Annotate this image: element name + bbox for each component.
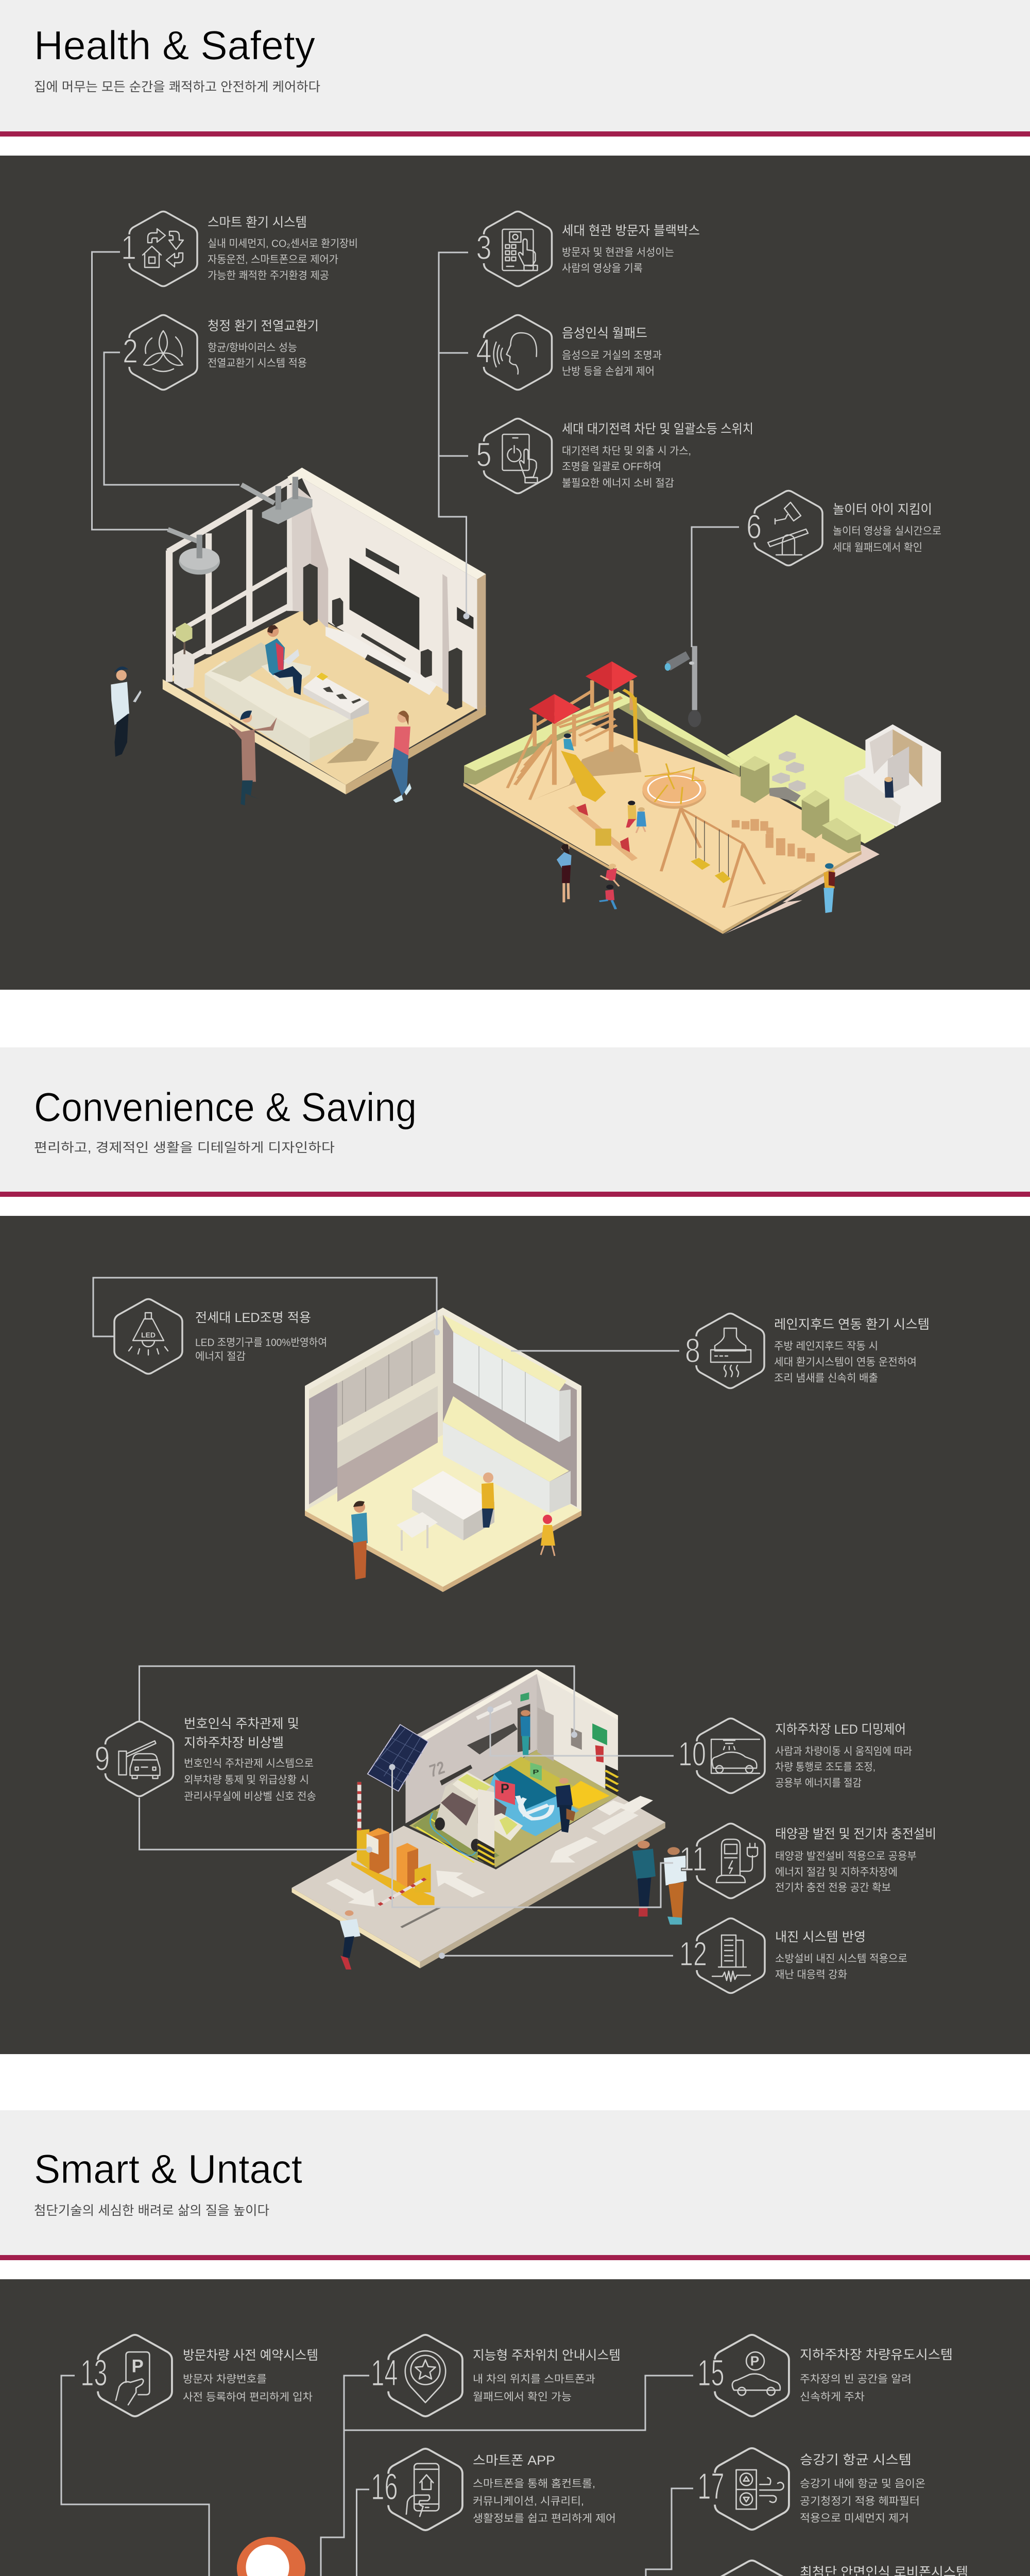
text on wall: 72: [427, 1757, 447, 1782]
text 10: [775, 1722, 912, 1789]
text 8: 세대 환기시스템이 연동 운전하여: [774, 1356, 917, 1368]
text 17: 공기청정기 적용 헤파필터: [800, 2496, 920, 2507]
section header: Health & Safety: [0, 0, 1030, 137]
item 16: smartphone app: [371, 2449, 616, 2530]
badge 9: 9: [95, 1739, 110, 1777]
text 7: 전세대 LED조명 적용: [195, 1311, 311, 1325]
text 11: 태양광 발전설비 적용으로 공용부: [775, 1851, 917, 1862]
text 12: 소방설비 내진 시스템 적용으로: [775, 1953, 907, 1965]
upper cabinets left: [319, 1328, 435, 1437]
text 6: [833, 502, 941, 553]
text 12: 내진 시스템 반영: [775, 1930, 866, 1944]
text 2: [208, 319, 319, 369]
item 6: playground child watch: [746, 490, 941, 566]
text 9: 번호인식 주차관제 및: [184, 1717, 299, 1731]
text 3: 방문자 및 현관을 서성이는: [562, 246, 674, 259]
woman in brown dress: [228, 710, 277, 805]
sofa: [204, 674, 310, 764]
badge 13: [80, 2335, 172, 2416]
badge 15: P: [750, 2353, 759, 2368]
text 5: 세대 대기전력 차단 및 일괄소등 스위치: [562, 422, 753, 436]
entry gate: [351, 1782, 435, 1905]
item 14: parking location guide: [371, 2335, 621, 2416]
running children: [599, 863, 619, 909]
bay floors: [409, 1750, 618, 1867]
item 17: elevator antibacterial: [697, 2448, 925, 2530]
text 5: 조명을 일괄로 OFF하여: [562, 461, 661, 473]
section header: Smart & Untact: [0, 2110, 1030, 2260]
woman at island: [482, 1472, 494, 1528]
item 7: LED lighting: [114, 1299, 327, 1374]
exit sign and bell: [592, 1723, 607, 1745]
badge 16: [371, 2449, 462, 2530]
text 12: 재난 대응력 강화: [775, 1969, 847, 1980]
badge 12: 12: [679, 1935, 707, 1973]
badge 9: [95, 1722, 173, 1796]
item 1: smart ventilation: [121, 211, 358, 286]
text 11: 에너지 절감 및 지하주차장에: [775, 1866, 898, 1878]
woman with tablet: [111, 667, 141, 757]
text 16: 커뮤니케이션, 시큐리티,: [473, 2496, 584, 2507]
text 3: 사람의 영상을 기록: [562, 263, 643, 274]
text 10: 사람과 차량이동 시 움직임에 따라: [775, 1745, 912, 1757]
badge 3: 3: [476, 228, 491, 266]
title: Smart & Untact: [34, 2146, 302, 2192]
text 13: 방문자 차량번호를: [183, 2373, 267, 2385]
badge 3: [476, 211, 552, 286]
seesaw: [571, 806, 635, 859]
text 1: 실내 미세먼지, CO₂센서로 환기장비: [208, 238, 358, 249]
item 13: visitor vehicle reservation: [80, 2335, 318, 2416]
badge 4: 4: [476, 332, 491, 370]
text 1: 가능한 쾌적한 주거환경 제공: [208, 270, 329, 281]
badge 5: 5: [476, 435, 491, 473]
text 1: 스마트 환기 시스템: [208, 215, 307, 230]
text 11: 태양광 발전 및 전기차 충전설비: [775, 1827, 936, 1841]
badge 2: 2: [123, 332, 138, 370]
badge 1: [121, 211, 197, 286]
ventilation units: [242, 485, 274, 503]
connectors: section two: [93, 1278, 679, 1959]
island: [412, 1471, 494, 1520]
subtitle: 첨단기술의 세심한 배려로 삶의 질을 높이다: [34, 2204, 269, 2218]
stepping stones: [772, 751, 805, 792]
text 6: 세대 월패드에서 확인: [833, 542, 922, 553]
CCTV camera: [665, 646, 701, 727]
text 9: 관리사무실에 비상벨 신호 전송: [184, 1791, 316, 1802]
text 6: 놀이터 영상을 실시간으로: [833, 526, 941, 537]
badge 5: [476, 418, 552, 494]
coffee table: [303, 674, 369, 714]
text 15: 신속하게 주차: [800, 2391, 865, 2403]
pillars: [478, 1765, 618, 1868]
text 11: 전기차 충전 전용 공간 확보: [775, 1882, 891, 1894]
text 16: [473, 2453, 616, 2524]
badge 15: 15: [697, 2353, 725, 2394]
panel: convenience and saving: [0, 1216, 1030, 2054]
text 9: 번호인식 주차관제 시스템으로: [184, 1758, 314, 1769]
swing: [661, 808, 765, 908]
text 15: [800, 2348, 953, 2403]
badge 8: [685, 1314, 764, 1388]
text 14: 지능형 주차위치 안내시스템: [473, 2348, 621, 2363]
text 8: [774, 1317, 930, 1384]
badge 12: [679, 1919, 765, 1993]
text 2: 항균/항바이러스 성능: [208, 342, 297, 353]
text 16: 생활정보를 쉽고 편리하게 제어: [473, 2513, 616, 2524]
badge 7: LED: [141, 1331, 156, 1339]
item 12: seismic design: [679, 1919, 907, 1993]
badge 7: [114, 1299, 182, 1374]
item 9: license plate recognition: [95, 1717, 316, 1802]
text 10: 지하주차장 LED 디밍제어: [775, 1722, 906, 1737]
badge 17: 17: [697, 2466, 725, 2507]
text 12: [775, 1930, 907, 1980]
illustration: isometric living room: [111, 468, 486, 805]
text 6: 놀이터 아이 지킴이: [833, 502, 932, 517]
text 3: [562, 224, 700, 274]
badge 10: [678, 1719, 765, 1793]
text 5: 불필요한 에너지 소비 절감: [562, 477, 674, 489]
badge 14: 14: [371, 2353, 398, 2394]
illustration: hand holding smartphone: [62, 2537, 580, 2576]
item 5: standby power switch: [476, 418, 753, 494]
text 10: 공용부 에너지를 절감: [775, 1777, 862, 1789]
text 13: 사전 등록하여 편리하게 입차: [183, 2392, 313, 2403]
illustration: isometric playground: [464, 646, 941, 935]
text 4: [562, 326, 662, 377]
badge 4: [476, 315, 552, 389]
item 4: voice wallpad: [476, 315, 662, 389]
panel: smart and untact: [0, 2279, 1030, 2576]
badge 2: [123, 315, 197, 389]
text 17: 승강기 항균 시스템: [800, 2453, 912, 2467]
item 10: LED dimming: [678, 1719, 912, 1793]
text 7: [195, 1311, 327, 1362]
text 1: [208, 215, 358, 281]
item 11: solar and EV charging: [679, 1824, 936, 1898]
badge 11: 11: [679, 1840, 707, 1878]
panel: health and safety: [0, 156, 1030, 990]
parking signs: P: [533, 1769, 539, 1775]
solar panel: [368, 1724, 428, 1791]
text 4: 음성인식 월패드: [562, 326, 647, 341]
man in kitchen: [351, 1501, 368, 1580]
text 4: 음성으로 거실의 조명과: [562, 349, 662, 362]
restroom building: [845, 724, 941, 826]
text 9: 외부차량 통제 및 위급상황 시: [184, 1774, 309, 1786]
shadows on sand: [533, 744, 641, 800]
illustration: isometric kitchen: [305, 1308, 581, 1592]
badge 6: 6: [746, 507, 762, 546]
businessman on bay: [556, 1778, 575, 1833]
text 16: 스마트폰 APP: [473, 2453, 555, 2468]
text 15: 주차장의 빈 공간을 알려: [800, 2373, 912, 2385]
subtitle: 편리하고, 경제적인 생활을 디테일하게 디자인하다: [34, 1141, 335, 1155]
man with shirt: [340, 1910, 360, 1970]
badge 15: [697, 2335, 789, 2416]
parking signs: P: [501, 1782, 509, 1796]
item 18: face recognition lobby phone: [696, 2561, 968, 2576]
walls: [405, 1669, 537, 1823]
text 8: 레인지후드 연동 환기 시스템: [774, 1317, 930, 1332]
text 2: 청정 환기 전열교환기: [208, 319, 319, 333]
plant: [174, 649, 195, 689]
item 8: range hood ventilation: [685, 1314, 930, 1388]
text 17: [800, 2453, 925, 2524]
connectors: section three: [61, 2376, 786, 2576]
badge 14: [371, 2335, 462, 2416]
item 15: parking guidance: [697, 2335, 953, 2416]
parked car: [435, 1772, 523, 1852]
badge 8: 8: [685, 1331, 700, 1369]
item 2: heat exchange ventilator: [123, 315, 319, 389]
text 3: 세대 현관 방문자 블랙박스: [562, 224, 700, 238]
children: [628, 801, 635, 805]
road arrows: [326, 1796, 653, 1907]
text 15: 지하주차장 차량유도시스템: [800, 2348, 953, 2362]
two men shaking hands: [632, 1841, 686, 1925]
upper cabinets right: [453, 1332, 559, 1442]
text 11: [775, 1827, 936, 1894]
badge 1: 1: [121, 228, 136, 266]
text 4: 난방 등을 손쉽게 제어: [562, 366, 655, 377]
text 17: 적용으로 미세먼지 제거: [800, 2512, 909, 2524]
item 3: visitor black box: [476, 211, 700, 286]
boy with backpack: [823, 863, 835, 913]
text 10: 차량 통행로 조도를 조정,: [775, 1761, 876, 1773]
badge 17: [697, 2448, 789, 2530]
girl in yellow dress: [541, 1515, 555, 1556]
badge 10: 10: [678, 1735, 706, 1773]
carousel: [642, 774, 706, 809]
badge 13: P: [131, 2356, 144, 2376]
wooden blocks: [732, 819, 815, 862]
text 17: 승강기 내에 항균 및 음이온: [800, 2478, 925, 2489]
badge 18: [696, 2561, 789, 2576]
connectors: section one: [92, 252, 739, 647]
text 7: LED 조명기구를 100%반영하여: [195, 1336, 327, 1349]
text 5: [562, 422, 753, 489]
text 2: 전열교환기 시스템 적용: [208, 358, 307, 369]
title: Convenience & Saving: [34, 1084, 417, 1130]
text 7: 에너지 절감: [195, 1351, 246, 1362]
play tower and stairs: [507, 680, 631, 800]
lights and door: [476, 1700, 512, 1720]
man on sofa: [265, 625, 302, 695]
location pin: [237, 2537, 305, 2576]
text 1: 자동운전, 스마트폰으로 제어가: [208, 253, 338, 266]
TV and speakers: [350, 558, 419, 650]
text 8: 주방 레인지후드 작동 시: [774, 1341, 878, 1352]
text 5: 대기전력 차단 및 외출 시 가스,: [562, 445, 691, 457]
text 14: 월패드에서 확인 가능: [473, 2391, 572, 2403]
subtitle: 집에 머무는 모든 순간을 쾌적하고 안전하게 케어하다: [34, 80, 320, 94]
woman in pink jacket: [391, 710, 411, 803]
mother: [557, 844, 572, 902]
badge 11: [679, 1824, 765, 1898]
text 13: [183, 2348, 318, 2403]
parking signs: [495, 1762, 542, 1805]
text 9: 지하주차장 비상벨: [184, 1736, 284, 1750]
illustration: isometric parking lot: [291, 1669, 686, 1970]
badge 6: [746, 490, 822, 566]
section header: Convenience & Saving: [0, 1047, 1030, 1197]
text 16: 스마트폰을 통해 홈컨트롤,: [473, 2478, 595, 2489]
text 8: 조리 냄새를 신속히 배출: [774, 1372, 878, 1384]
text 9: [184, 1717, 316, 1802]
text 13: 방문차량 사전 예약시스템: [183, 2348, 318, 2363]
text 14: 내 차의 위치를 스마트폰과: [473, 2373, 595, 2385]
text 14: [473, 2348, 621, 2403]
badge 16: 16: [371, 2467, 398, 2508]
title: Health & Safety: [34, 22, 315, 68]
badge 13: 13: [80, 2353, 108, 2394]
